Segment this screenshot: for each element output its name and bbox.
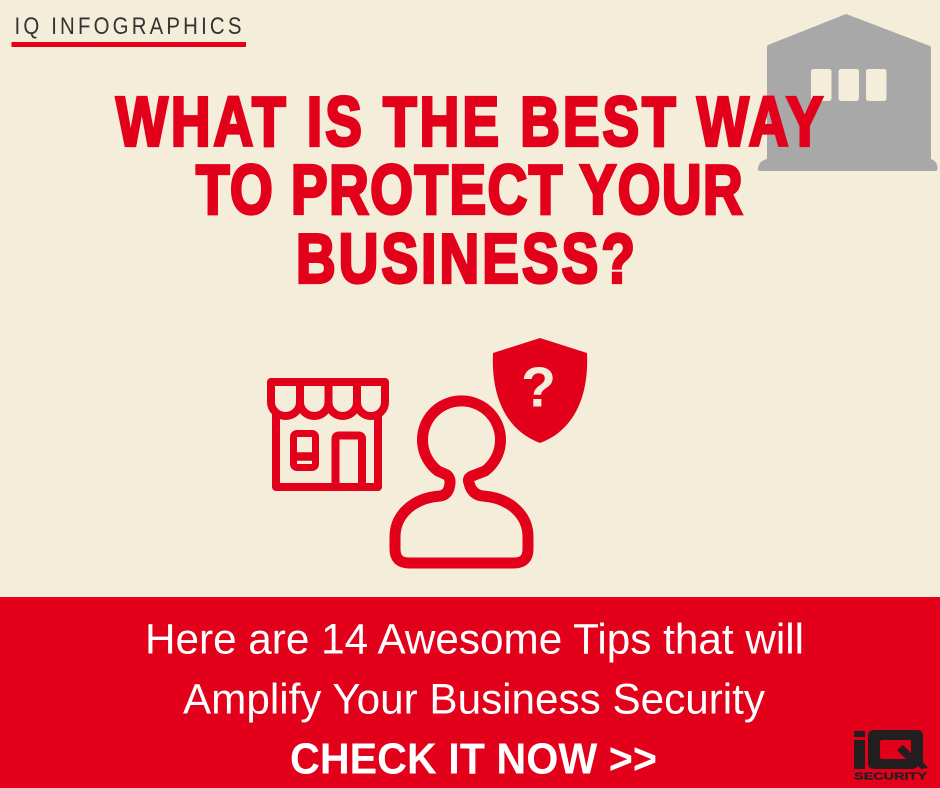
logo: IQ Security [854,730,928,782]
banner text: CHECK IT NOW >> [290,734,657,784]
brand label: IQ Infographics: IQ INFOGRAPHICS [14,12,241,39]
banner text [145,616,804,784]
banner text: Amplify Your Business Security [183,676,765,724]
title: TO PROTECT YOUR [196,151,743,229]
logo: IQ Security: SECURITY [854,770,927,782]
icon: grey building [758,14,938,171]
icon: storefront [271,382,385,487]
icon: person outline [395,401,528,563]
icon: shield with question mark [493,338,587,443]
title [116,83,823,298]
title: WHAT IS THE BEST WAY [116,83,823,161]
icon: shield with question mark: ? [521,356,556,420]
panel: red call-to-action banner [0,597,940,788]
banner text: Here are 14 Awesome Tips that will [145,616,804,664]
title: BUSINESS? [296,220,635,298]
